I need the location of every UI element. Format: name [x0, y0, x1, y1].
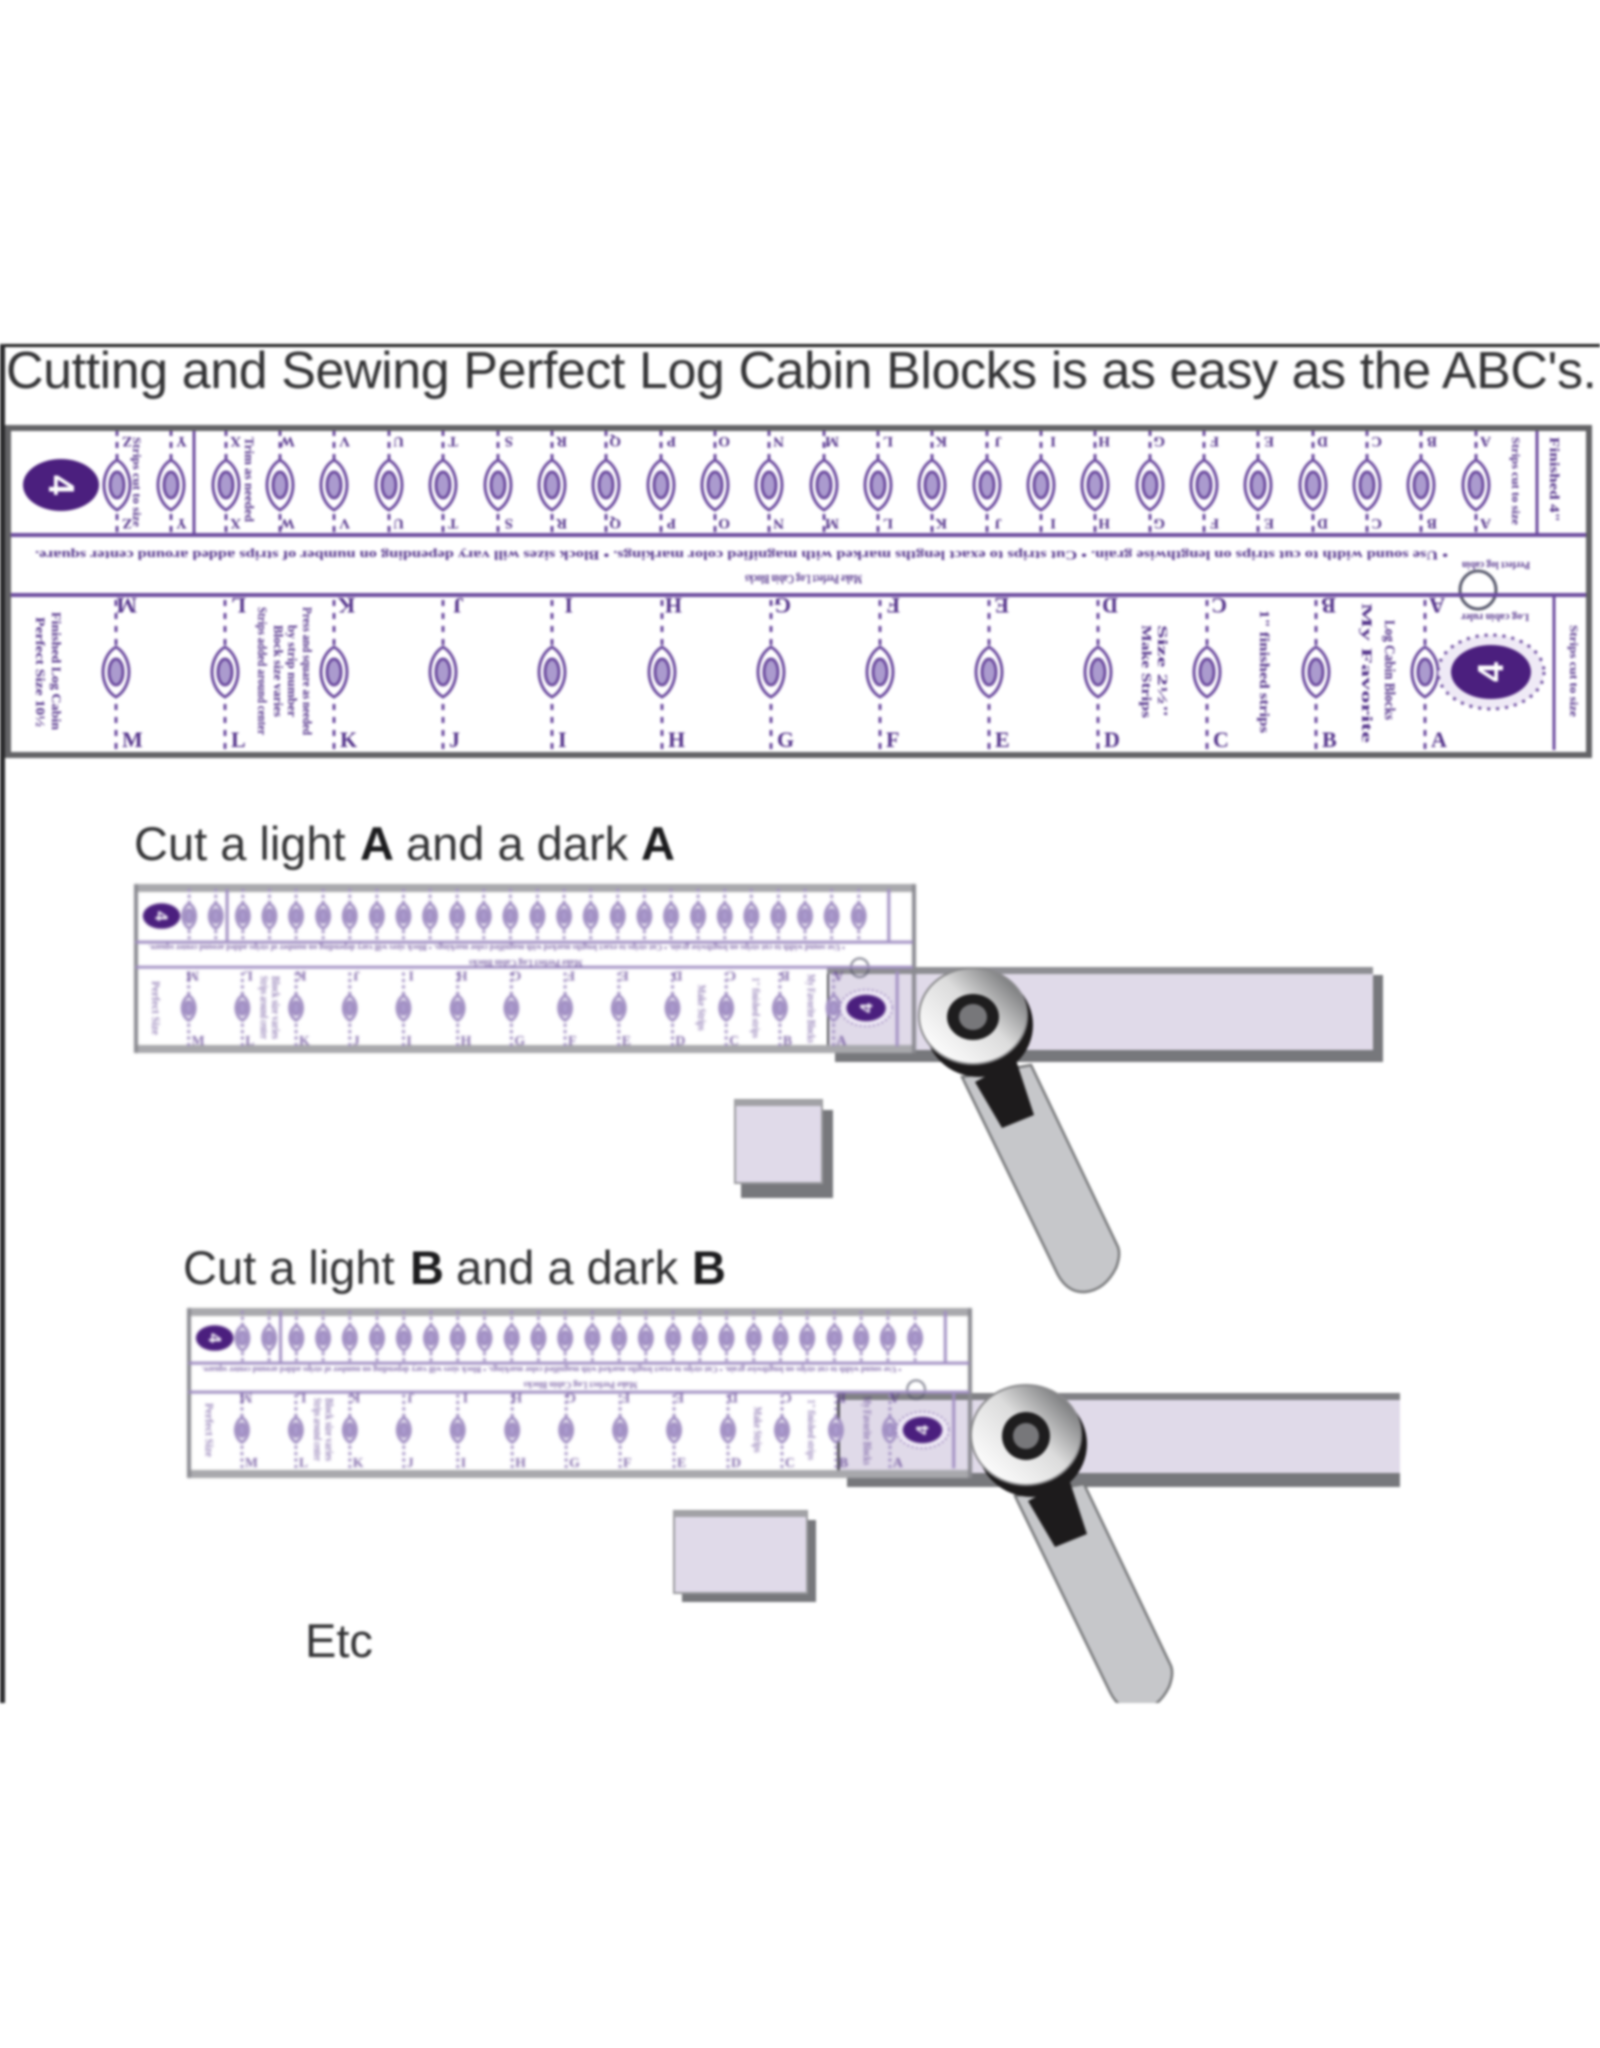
ruler text: Make Perfect Log Cabin Blocks [523, 1379, 637, 1390]
ruler text: Strips cut to size [1509, 437, 1523, 526]
ruler text: Make Perfect Log Cabin Blocks [745, 572, 862, 587]
panel: ruler in step A [134, 884, 916, 1053]
ruler text: Make Strips [695, 985, 709, 1031]
cutter disc [971, 1385, 1081, 1485]
heading: cut B: B [410, 1241, 444, 1294]
cutter handle [1015, 1484, 1172, 1711]
page frame: top rule [0, 344, 1600, 347]
ruler text: ABCDEFGHIJKLM [239, 1391, 900, 1406]
ruler text: Strips added around center [255, 607, 270, 735]
cutter blade shadow [982, 1412, 1089, 1499]
ruler text: Finished 4" [1546, 437, 1561, 522]
ruler text: 4 [152, 911, 172, 921]
title: Cutting and Sewing Perfect Log Cabin Blocks is as easy as the ABC's. [6, 342, 1597, 400]
ruler text: 4 [41, 475, 82, 495]
ruler scaled contents [188, 1311, 970, 1470]
ruler text: Make Strips [751, 1407, 765, 1453]
ruler text: 1" finished strips [749, 978, 761, 1038]
ruler text: • Use sound width to cut strips on lengthwise grain. • Cut strips to exact lengths marked with magnified color markings. • Block sizes will vary depending on number of strips added around center square. [149, 943, 845, 952]
ruler scaled contents [135, 889, 913, 1048]
step B: strip of fabric under the ruler [837, 1393, 1400, 1487]
panel: full-size log cabin ruler [8, 428, 1589, 755]
ruler text: MLKJIHGFEDCBA [245, 1455, 903, 1470]
cutter handle [962, 1065, 1119, 1292]
cutter black collar [975, 1060, 1034, 1128]
ruler text: Size 2½" [1154, 625, 1169, 718]
ruler text: Trim as needed [242, 437, 257, 523]
cutter hub centre [1013, 1423, 1039, 1449]
ruler text: Block size varies [323, 1398, 337, 1461]
cutter hub [1002, 1412, 1050, 1460]
ruler outline [134, 884, 916, 1053]
heading: cut A: and a dark [406, 817, 629, 870]
ruler text: Strips around center [258, 976, 272, 1039]
ruler text: Perfect log cabin [1462, 559, 1530, 571]
ruler markings [188, 1311, 970, 1468]
ruler text: Strips around center [311, 1398, 325, 1461]
ruler text: ABCDEFGHIJKLMNOPQRSTUVWXYZ [122, 515, 1491, 531]
ruler text: 4 [912, 1425, 932, 1435]
ruler text [33, 433, 1581, 752]
heading: cut B: Cut a light [183, 1241, 395, 1294]
ruler text: Finished Log Cabin [49, 612, 64, 731]
ruler text: 4 [856, 1003, 876, 1013]
ruler text: My Favorite Blocks [861, 1396, 875, 1465]
ruler outline [8, 428, 1589, 755]
ruler text: MLKJIHGFEDCBA [192, 1033, 847, 1048]
ruler text: Block size varies [269, 976, 283, 1039]
page frame: left rule [0, 344, 5, 1703]
ruler text: Make Perfect Log Cabin Blocks [469, 957, 582, 968]
ruler text: Perfect Size [149, 981, 163, 1035]
ruler text: My Favorite [1358, 603, 1374, 744]
step A: strip of fabric under the ruler [827, 967, 1383, 1062]
ruler markings [8, 430, 1586, 750]
heading: cut B: B [692, 1241, 726, 1294]
cutter hub [947, 994, 999, 1040]
ruler text: MLKJIHGFEDCBA [122, 727, 1447, 752]
ruler text: ABCDEFGHIJKLM [186, 969, 843, 984]
cutter hub centre [959, 1004, 987, 1030]
ruler text: Perfect Size [202, 1403, 216, 1457]
ruler text: 4 [205, 1333, 225, 1343]
ruler text: Press and square as needed [300, 607, 315, 736]
ruler text: Block size varies [271, 625, 286, 717]
ruler text: • Use sound width to cut strips on lengthwise grain. • Cut strips to exact lengths marked with magnified color markings. • Block sizes will vary depending on number of strips added around center square. [35, 548, 1448, 563]
ruler text: Perfect Size 10½ [33, 617, 48, 727]
heading: cut A: A [641, 817, 675, 870]
cutter blade shadow [925, 973, 1033, 1077]
heading: cut B: and a dark [456, 1241, 679, 1294]
ruler text: Log Cabin Blocks [1381, 620, 1397, 720]
ruler text [202, 1333, 932, 1470]
ruler text: by strip number [285, 625, 300, 717]
cutter black collar [1028, 1479, 1087, 1547]
panel: ruler in step B [187, 1308, 972, 1478]
ruler text: Log cabin ruler [1461, 611, 1529, 623]
ruler text: 1" finished strips [1256, 610, 1271, 734]
ruler text [149, 911, 876, 1048]
cutter disc [919, 968, 1027, 1064]
ruler outline [187, 1308, 972, 1478]
ruler text: 4 [1470, 662, 1511, 682]
ruler text: 1" finished strips [805, 1400, 817, 1460]
icon: rotary cutter B [971, 1385, 1172, 1711]
ruler text: My Favorite Blocks [804, 974, 818, 1043]
ruler markings [135, 889, 913, 1046]
heading: cut A: A [360, 817, 394, 870]
ruler text: Make Strips [1138, 625, 1153, 719]
heading: cut A: Cut a light [134, 817, 346, 870]
text: Etc: Etc [305, 1614, 373, 1667]
icon: rotary cutter A [919, 968, 1119, 1292]
ruler text: ABCDEFGHIJKLM [116, 593, 1445, 618]
fabric square B [674, 1511, 816, 1602]
ruler text: Strips cut to size [1567, 625, 1581, 718]
ruler text: • Use sound width to cut strips on lengthwise grain. • Cut strips to exact lengths marked with magnified color markings. • Block sizes will vary depending on number of strips added around center square. [202, 1365, 901, 1374]
ruler text: ABCDEFGHIJKLMNOPQRSTUVWXYZ [122, 433, 1491, 449]
fabric square A [735, 1100, 833, 1198]
ruler text: Strips cut to size [130, 437, 144, 528]
